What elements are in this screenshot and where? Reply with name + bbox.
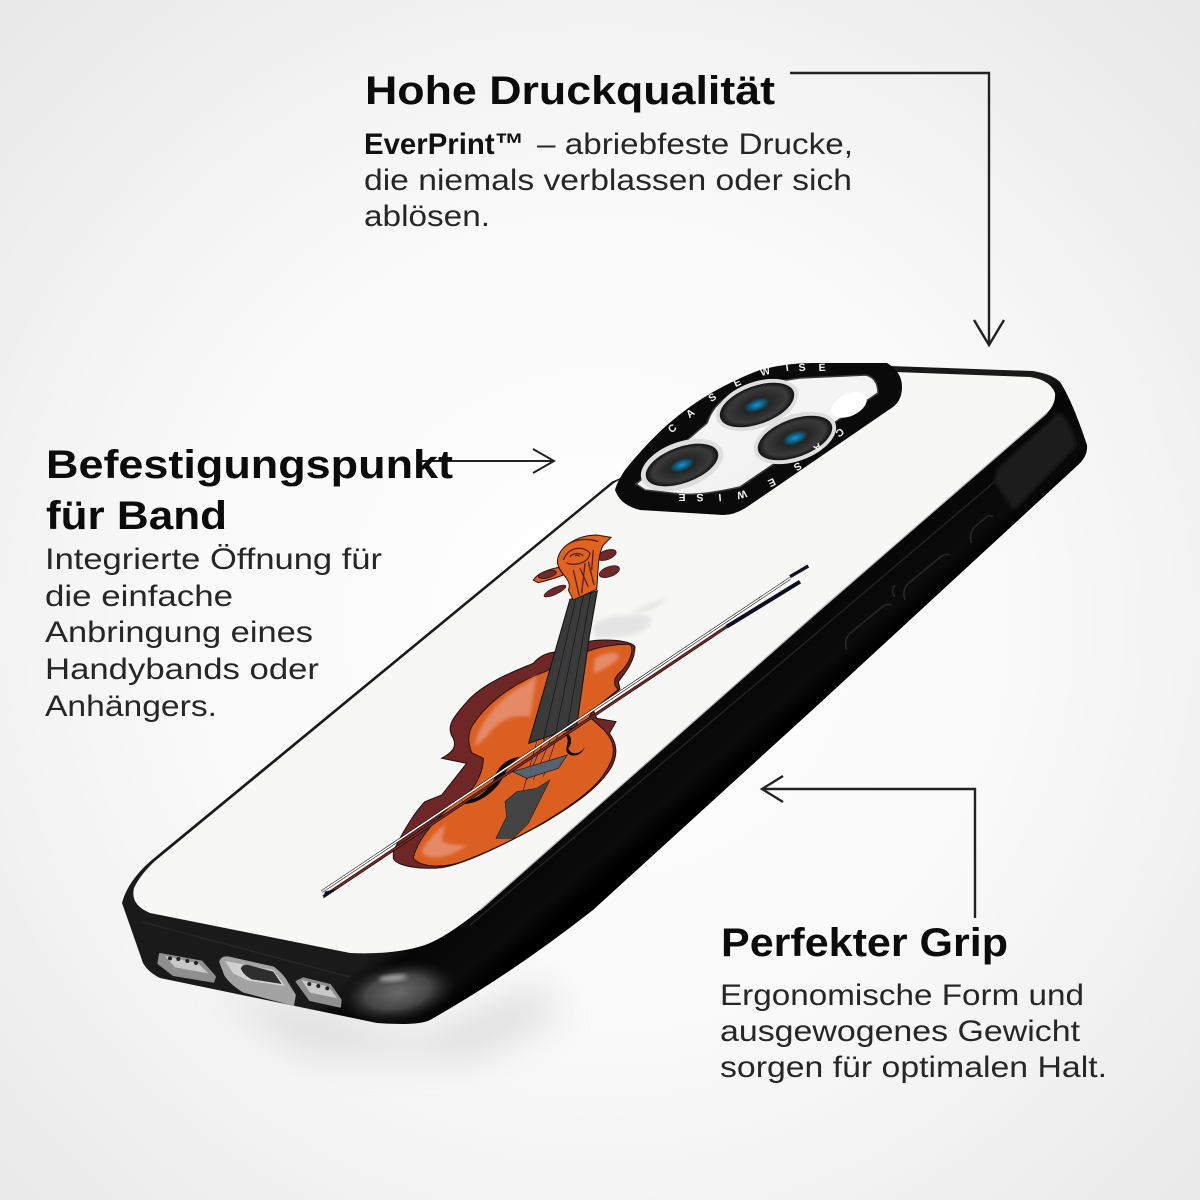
bridge xyxy=(513,755,567,778)
casewise lettering bottom: E xyxy=(678,491,686,503)
speaker left xyxy=(158,954,215,982)
apple logo ghost xyxy=(593,597,668,638)
phone shadow xyxy=(210,985,560,1060)
description: Anbringung eines xyxy=(45,616,313,649)
violin back body xyxy=(393,640,635,868)
casewise lettering top: S xyxy=(798,362,806,374)
casewise lettering top xyxy=(666,362,826,436)
casewise lettering top: C xyxy=(666,421,680,436)
casewise lettering bottom: W xyxy=(735,487,748,501)
casewise lettering top: I xyxy=(785,362,789,374)
casewise lettering bottom: I xyxy=(718,491,722,503)
description: Integrierte Öffnung für xyxy=(45,543,382,576)
bow stick xyxy=(323,627,727,897)
body highlight upper xyxy=(475,675,537,747)
heading xyxy=(46,443,453,538)
bow grip xyxy=(727,582,800,627)
description: sorgen für optimalen Halt. xyxy=(720,1051,1107,1084)
violin front body xyxy=(413,644,632,866)
description: EverPrint™ xyxy=(364,128,524,161)
violin illustration xyxy=(322,535,808,898)
bow stick colour xyxy=(323,627,727,897)
volume buttons xyxy=(846,516,993,650)
bottom face seam xyxy=(142,922,350,977)
camera module xyxy=(615,362,902,515)
charging port xyxy=(220,957,295,1005)
neck strings xyxy=(543,593,591,740)
lens left xyxy=(634,429,730,501)
speaker right xyxy=(297,978,341,1007)
bow tip xyxy=(790,566,808,577)
description: ausgewogenes Gewicht xyxy=(720,1015,1081,1048)
case black silhouette xyxy=(122,366,1087,1024)
casewise lettering top: A xyxy=(684,406,698,421)
scroll xyxy=(557,535,611,600)
bow hair white xyxy=(322,578,790,892)
casewise lettering bottom: S xyxy=(791,459,804,473)
white back surface xyxy=(133,372,1055,953)
lens top xyxy=(709,369,805,441)
heading: Befestigungspunkt xyxy=(46,443,453,487)
casewise lettering top: E xyxy=(818,362,826,374)
description: – abriebfeste Drucke, xyxy=(537,128,853,161)
arrow: to phone side grip xyxy=(762,776,975,918)
description xyxy=(364,128,853,233)
action button panel xyxy=(995,412,1076,510)
scroll carving xyxy=(563,539,598,596)
heading: Hohe Druckqualität xyxy=(365,69,775,113)
description: die niemals verblassen oder sich xyxy=(364,164,852,197)
tailpiece xyxy=(496,780,550,838)
text block: Perfekter Grip xyxy=(720,921,1107,1084)
description: Anhängers. xyxy=(45,690,217,723)
arrow: to strap attachment point xyxy=(420,449,554,473)
body highlight right xyxy=(593,653,618,673)
description: ablösen. xyxy=(364,200,490,233)
side seam xyxy=(470,450,1032,925)
heading: Perfekter Grip xyxy=(721,921,1008,965)
description: die einfache xyxy=(45,580,233,613)
camera window xyxy=(636,375,878,494)
casewise lettering top: S xyxy=(706,391,719,405)
left peg lobe xyxy=(533,567,563,583)
description: Handybands oder xyxy=(45,653,319,686)
description xyxy=(45,543,382,723)
description: Ergonomische Form und xyxy=(720,979,1084,1012)
camera bump frame xyxy=(615,363,902,515)
bow frog xyxy=(323,888,338,898)
bottom right corner highlight xyxy=(334,952,462,1032)
corner specular xyxy=(379,974,407,982)
heading: für Band xyxy=(46,494,227,538)
description xyxy=(720,979,1107,1084)
casewise lettering top: E xyxy=(732,376,743,390)
text block: Befestigungspunkt xyxy=(45,443,453,723)
casewise lettering bottom: A xyxy=(811,440,824,455)
phone case xyxy=(122,366,1087,1032)
neck fingerboard xyxy=(529,591,597,743)
lens right xyxy=(747,402,843,474)
flash xyxy=(827,387,871,423)
casewise lettering bottom: E xyxy=(766,475,777,489)
white edge highlight xyxy=(480,413,1047,910)
casewise lettering bottom xyxy=(678,425,846,503)
left f-hole xyxy=(462,757,520,804)
casewise lettering bottom: S xyxy=(696,491,704,503)
strings below neck xyxy=(523,733,558,790)
pegs xyxy=(537,547,621,599)
right f-hole xyxy=(563,733,585,756)
body highlight lower xyxy=(422,825,467,857)
text block: Hohe Druckqualität xyxy=(364,69,853,233)
bow hair xyxy=(322,578,790,892)
arrow: top to phone top edge xyxy=(790,73,1004,345)
casewise lettering top: W xyxy=(759,365,772,379)
casewise lettering bottom: C xyxy=(833,425,846,440)
